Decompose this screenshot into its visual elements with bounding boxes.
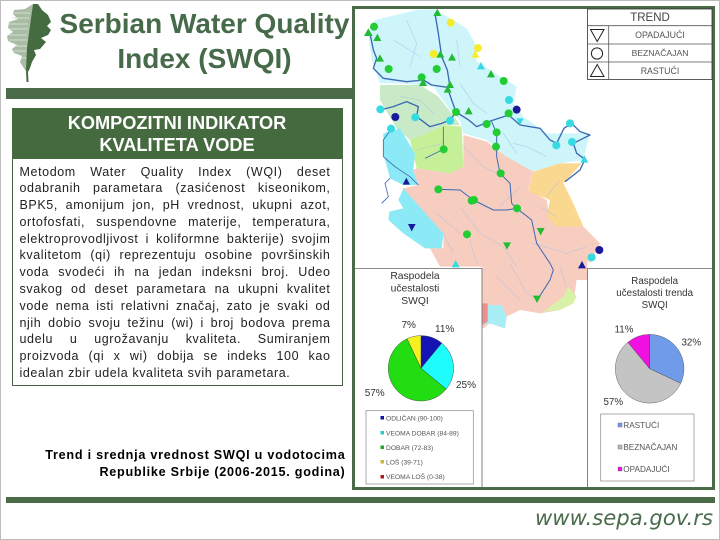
text block: method description: idealan zbir udela kvaliteta svih parametara.: [20, 366, 290, 380]
pie labels: [364, 320, 476, 398]
rivers: [369, 13, 589, 298]
map region: orange basin: [528, 163, 583, 226]
icon: rising triangle: [590, 64, 604, 76]
legend: SWQI classes: VEOMA DOBAR (84-89): [386, 430, 458, 437]
chart title: učestalosti: [390, 283, 439, 294]
title: Index (SWQI): [117, 42, 292, 74]
text block: method description: proizvoda (qi x wi) dobija se indeks 100 kao: [20, 349, 330, 363]
chart title: Raspodela: [631, 276, 678, 286]
legend: SWQI classes: LOŠ (39-71): [386, 457, 422, 466]
pie labels: 11%: [614, 324, 633, 335]
station markers: navy falling triangle: [407, 223, 415, 231]
station markers: cyan circles: [376, 95, 595, 261]
title: [60, 8, 350, 74]
map region: Drina cyan: [383, 128, 443, 248]
title: Serbian Water Quality: [60, 8, 349, 38]
chart title: učestalosti trenda: [616, 288, 693, 298]
panel heading: composite indicator: KOMPOZITNI INDIKATOR: [68, 112, 286, 132]
legend: trend classes: BEZNAČAJAN: [623, 442, 677, 452]
caption: Republike Srbije (2006-2015. godina): [99, 465, 346, 479]
trend legend table: BEZNAČAJAN: [631, 48, 688, 58]
trend legend table: [587, 8, 712, 79]
pie labels: 25%: [455, 380, 476, 390]
icon: falling triangle: [590, 29, 604, 41]
tributaries: [393, 19, 586, 299]
pie labels: 32%: [681, 337, 701, 348]
text block: method description: kvalitetom (qi) reprezentuju osobine površinskih: [20, 248, 330, 262]
legend: SWQI classes: [366, 410, 473, 484]
text block: method description: svakog od deset parametara na ukupni kvalitet: [20, 282, 330, 296]
legend: trend classes: [600, 414, 694, 480]
pie labels: 11%: [435, 324, 454, 334]
pie labels: 7%: [401, 320, 416, 330]
pie labels: 57%: [603, 396, 623, 408]
pie chart: SWQI: [388, 335, 453, 401]
legend: trend classes: RASTUĆI: [623, 420, 659, 430]
text block: method description: udelu u ugrožavanju kvaliteta. Sumiranjem: [20, 332, 330, 346]
text block: method description: Metodom Water Quality Index (WQI) deset: [20, 164, 330, 178]
map region: Morava pink: [403, 134, 599, 328]
chart title: SWQI: [641, 300, 667, 310]
station markers: green falling triangles: [502, 227, 544, 302]
pie chart: trend: [615, 334, 683, 403]
station markers: yellow circles: [429, 18, 481, 57]
map region: Kolubara lime: [409, 124, 463, 173]
legend: SWQI classes: ODLIČAN (90-100): [386, 413, 442, 422]
panel: SWQI frequency distribution: [354, 268, 482, 486]
header bar: [6, 88, 352, 98]
text block: method description: BPK5, amonijum jon, pH vrednost, ukupni azot,: [20, 198, 330, 212]
legend: SWQI classes: DOBAR (72-83): [386, 444, 433, 452]
station markers: cyan falling triangle: [516, 118, 523, 124]
map frame: [353, 7, 713, 488]
chart title: SWQI: [401, 296, 428, 306]
station markers: cyan rising triangles: [451, 61, 588, 267]
map of Serbia: [363, 8, 603, 328]
icon: oak leaf logo: [7, 4, 51, 82]
legend: SWQI classes: VEOMA LOŠ (0-38): [386, 472, 444, 481]
text block: method description: ortofosfati, suspendovne materije, temperatura,: [20, 215, 330, 229]
website url: www.sepa.gov.rs: [534, 506, 713, 530]
text block: method description: [12, 158, 342, 386]
pie labels: 57%: [364, 388, 384, 398]
station markers: navy circles: [391, 105, 603, 253]
map region: southern fragments: [483, 304, 506, 328]
station markers: green rising triangles: [363, 8, 494, 114]
panel: SWQI trend distribution: [587, 268, 712, 486]
panel heading: composite indicator: KVALITETA VODE: [99, 134, 255, 154]
station markers: yellow rising triangle: [471, 50, 479, 57]
text block: method description: elektroprovodljivost i koliformne bakterije) svojim: [20, 232, 330, 246]
text block: method description: odabranih parametara (zasićenost kiseonikom,: [20, 181, 330, 195]
legend: trend classes: OPADAJUĆI: [623, 464, 669, 474]
map region: Srem light green: [379, 84, 459, 139]
station markers: navy rising triangles: [402, 177, 585, 268]
map region: north and east basin: [368, 9, 589, 171]
text block: method description: vode nema isti relativni značaj, zato je svaki od: [20, 299, 330, 313]
pie labels: [603, 324, 701, 408]
chart title: Raspodela: [390, 270, 439, 282]
trend legend table: RASTUĆI: [640, 66, 679, 76]
trend legend table: TREND: [630, 12, 669, 24]
caption: [45, 448, 346, 479]
text block: method description: njih dobio svoju težinu (wi) i broj bodova prema: [20, 316, 330, 330]
caption: Trend i srednja vrednost SWQI u vodotocima: [45, 448, 346, 462]
text block: method description: voda svodeći ih na jedan indeksni broj. Udeo: [20, 265, 330, 279]
trend legend table: OPADAJUĆI: [635, 30, 684, 40]
footer bar: [6, 496, 714, 502]
icon: neutral circle: [591, 47, 602, 59]
panel heading: composite indicator: [12, 108, 342, 158]
station markers: green circles: [369, 22, 520, 238]
